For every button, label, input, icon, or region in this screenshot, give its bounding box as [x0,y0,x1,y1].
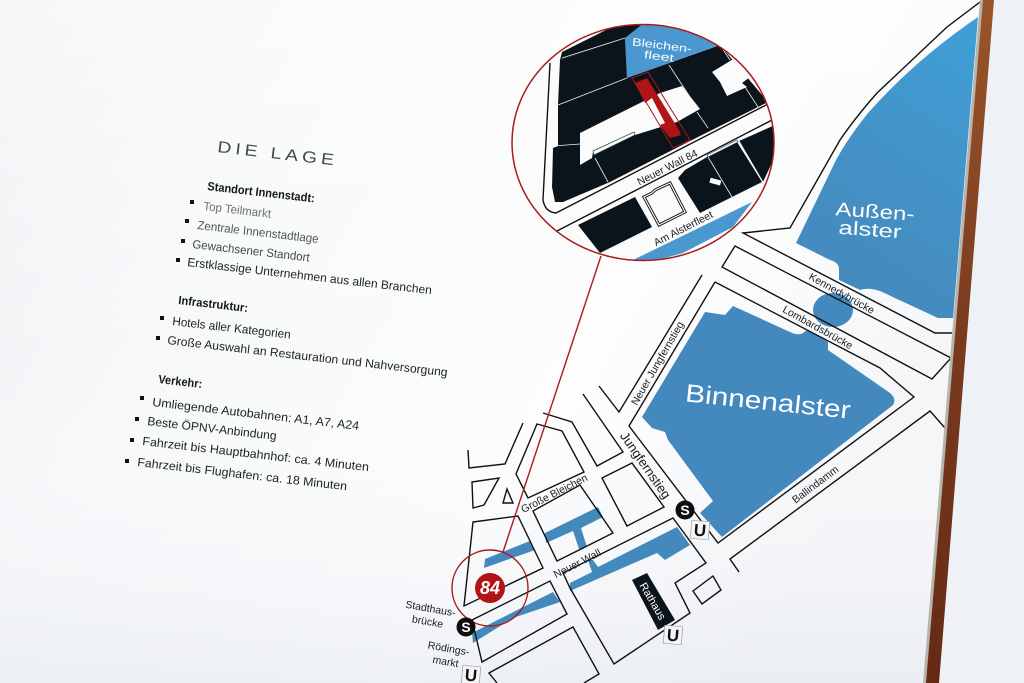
text block: Standort Innenstadt: Top Teilmarkt [203,199,272,221]
text block: Verkehr [125,372,370,493]
text block: Standort Innenstadt: Standort Innenstadt: [207,179,316,205]
lens outline [512,24,774,260]
label: Rathaus: Rathaus [637,581,668,623]
icon: S-Bahn Stadthausbrücke [456,618,476,636]
street labels: markt [432,654,460,670]
street lines [543,63,770,213]
street labels: Neuer Jungfernstieg [629,319,687,407]
lens label: Bleichenfleet: Bleichen- [631,36,693,56]
water labels: Binnenalster [684,379,852,425]
street labels: Jungfernstieg [617,429,674,502]
water: Binnenalster [642,306,894,537]
street labels: Ballindamm [790,463,841,506]
icon: U-Bahn Jungfernstieg: U [693,520,707,540]
marker: 84: 84 [480,578,500,598]
water: canals [472,507,690,643]
highlighted property [635,78,681,138]
text block: Verkehr: Umliegende Autobahnen: A1, A7, A24 [152,395,360,433]
property dividers [553,38,758,182]
marker: 84 [475,573,505,603]
location ring [452,550,528,626]
title: DIE LAGE [217,139,339,170]
water: Außenalster [796,17,978,327]
lens label: Neuer Wall 84: Neuer Wall 84 [635,147,700,188]
detail lens: Neuer Wall 84 [512,18,778,265]
text block: Infrastruktur [156,293,448,379]
street labels: Kennedybrücke [807,271,876,317]
icon: U-Bahn Rathaus [663,625,683,646]
icon: U-Bahn Rathaus: U [666,625,680,645]
text block: Standort Innenstadt [176,179,433,297]
street labels: Stadthaus- [404,599,457,619]
building lower left [578,197,652,253]
text block: Infrastruktur: Hotels aller Kategorien [172,314,291,342]
street labels [404,271,876,670]
icon: S-Bahn Jungfernstieg [676,500,694,520]
text block: Standort Innenstadt: Erstklassige Unternehmen aus allen Branchen [187,255,433,297]
street labels: Große Bleichen [519,472,590,516]
text block: Standort Innenstadt: Zentrale Innenstadtlage [197,218,320,246]
text block: Infrastruktur: Große Auswahl an Restauration und Nahversorgung [167,333,448,379]
text block: Standort Innenstadt: Gewachsener Standort [192,237,311,265]
lens label: Am Alsterfleet: Am Alsterfleet [652,209,715,249]
icon: S-Bahn Stadthausbrücke: S [461,619,471,635]
water labels: Außen- [835,199,915,226]
water labels: alster [838,218,903,243]
detail lens: Neuer Wall 84: fleet [643,49,674,65]
street labels: Lombardsbrücke [780,304,855,352]
buildings north of Neuer Wall [552,38,768,202]
courtyards [580,86,700,165]
label: Rathaus [632,573,675,630]
water: Am Alsterfleet [633,202,752,265]
icon: U-Bahn Jungfernstieg [690,520,710,541]
building pair right of street [678,142,762,213]
street labels: Rödings- [427,639,471,659]
text block: Verkehr: Fahrzeit bis Flughafen: ca. 18 Minuten [137,455,348,493]
icon: U-Bahn Rödingsmarkt [461,665,481,683]
leader line to detail lens [503,256,601,552]
water: Bleichenfleet [625,25,717,78]
text block: Verkehr: Beste ÖPNV-Anbindung [147,414,277,443]
page spine: metal edge and brown board [923,0,994,683]
outlined building [644,183,685,225]
street labels: brücke [411,613,444,631]
text block: Verkehr: Verkehr: [158,372,203,391]
water labels [684,199,915,425]
icon: S-Bahn Jungfernstieg: S [680,502,690,518]
outlined annex [593,132,635,155]
buildings top edge [560,25,641,60]
street labels: Neuer Wall [552,547,603,581]
text block: Infrastruktur: Infrastruktur: [178,293,249,315]
street lines [464,2,980,683]
text block: Verkehr: Fahrzeit bis Hauptbahnhof: ca. 4 Minuten [142,434,370,474]
